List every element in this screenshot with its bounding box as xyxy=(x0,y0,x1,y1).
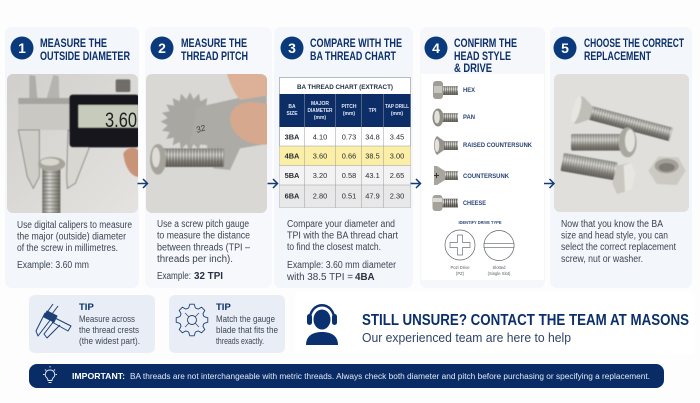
table: BA thread chart: (mm) xyxy=(343,111,355,117)
text: step 3 instructions xyxy=(286,219,398,283)
table: BA thread chart xyxy=(280,78,410,208)
table: BA thread chart: 2.30 xyxy=(390,192,404,200)
heading: measure the thread pitch xyxy=(181,36,248,63)
step number 2: 2 xyxy=(158,40,166,56)
text: step 1 instructions: of the screw in millimetres. xyxy=(17,243,118,254)
table: BA thread chart: TPI xyxy=(369,108,377,114)
icon: pozi drive xyxy=(445,230,475,276)
heading: confirm the head style and drive: HEAD STYLE xyxy=(454,49,511,63)
table: BA thread chart: 38.5 xyxy=(365,152,380,160)
table: BA thread chart: BA THREAD CHART (EXTRACT) xyxy=(297,84,393,91)
arrow: step 1 to 2 xyxy=(138,179,148,188)
step number 5: 5 xyxy=(561,40,569,56)
head style: raised countersunk: RAISED COUNTERSUNK xyxy=(463,143,533,149)
panel: step 2 measure the thread pitch xyxy=(146,36,267,281)
table: BA thread chart: TAP DRILL xyxy=(385,104,409,110)
heading: choose the correct replacement: REPLACEMENT xyxy=(584,49,651,63)
text: step 5 instructions: select the correct replacement xyxy=(561,242,676,253)
icon: pozi drive: (PZ) xyxy=(456,271,465,276)
text: tip 2: threads exactly. xyxy=(216,336,264,346)
text: step 3 instructions: to find the closest match. xyxy=(287,242,381,253)
text: step 1 instructions: the major (outside) diameter xyxy=(17,232,127,242)
table: BA thread chart: 43.1 xyxy=(365,171,380,180)
head style: cheese xyxy=(432,195,486,211)
label: identify drive type: IDENTIFY DRIVE TYPE xyxy=(458,220,502,225)
icon: support person with headset xyxy=(306,305,338,345)
icon: slotted drive: (Single Slot) xyxy=(488,271,511,276)
step number 4: 4 xyxy=(432,40,440,56)
step number 5 xyxy=(554,36,576,60)
panel: step 1 measure the outside diameter xyxy=(5,27,140,288)
tip card: match the gauge blade xyxy=(169,295,285,353)
table: BA thread chart: 47.9 xyxy=(365,192,380,200)
text: tip 1 xyxy=(79,302,140,346)
text: step 3 instructions: with 38.5 TPI = xyxy=(286,272,353,283)
table: BA thread chart: 34.8 xyxy=(365,132,380,142)
photo: replacement screws and nut xyxy=(554,74,689,212)
text: tip 2: TIP xyxy=(216,302,231,313)
table: BA thread chart: (mm) xyxy=(314,115,326,121)
important banner xyxy=(29,364,664,388)
text: step 2 instructions: between threads (TPI – xyxy=(157,242,250,254)
head style: countersunk xyxy=(434,166,510,185)
text: step 2 instructions: Use a screw pitch gauge xyxy=(157,219,249,230)
table: BA thread chart: BA xyxy=(288,104,296,110)
arrow: step 2 to 3 xyxy=(268,179,278,188)
text: tip 1: Measure across xyxy=(79,314,135,324)
text: step 5 instructions: Now that you know the BA xyxy=(561,219,663,230)
step number 2 xyxy=(150,36,174,60)
table: BA thread chart: 2.65 xyxy=(390,171,404,180)
icon: pozi drive: Pozi Drive xyxy=(450,265,470,270)
icon: slotted drive: Slotted xyxy=(492,265,506,270)
table: BA thread chart: 6BA xyxy=(285,192,300,200)
text: step 1 instructions: Use digital calipers to measure xyxy=(17,220,132,231)
text: important notice: BA threads are not interchangeable with metric threads. Always check both diameter and pitch before purchasing or specifying a replacement. xyxy=(130,372,650,381)
head style: cheese: CHEESE xyxy=(463,201,486,207)
white chart of head styles xyxy=(421,74,544,280)
arrow: step 4 to 5 xyxy=(544,179,554,188)
table: BA thread chart: 0.51 xyxy=(342,192,356,200)
text: step 2 instructions: Example: xyxy=(157,271,191,282)
text: step 2 instructions xyxy=(157,219,250,282)
text: tip 1: TIP xyxy=(79,302,94,313)
icon: slotted drive xyxy=(484,230,514,276)
heading: measure the outside diameter: OUTSIDE DIAMETER xyxy=(40,49,130,63)
contact panel xyxy=(295,292,695,354)
step number 3 xyxy=(280,36,304,60)
arrow: step 3 to 4 xyxy=(410,179,420,188)
photo: digital calipers reading 3.60: 3.60 xyxy=(105,109,137,132)
text: tip 1: (the widest part). xyxy=(79,336,140,346)
step number 1: 1 xyxy=(18,40,26,56)
heading: confirm the head style and drive: & DRIVE xyxy=(454,61,492,75)
tip card: measure across the thread crests xyxy=(29,295,155,353)
head style: countersunk: COUNTERSUNK xyxy=(463,174,510,180)
heading: measure the outside diameter: MEASURE THE xyxy=(40,36,107,50)
head style: hex: HEX xyxy=(463,88,475,94)
text: step 1 instructions xyxy=(17,220,132,271)
text: important notice: IMPORTANT: xyxy=(72,371,125,381)
table: BA thread chart: (mm) xyxy=(391,111,403,117)
heading: compare with the BA thread chart: BA THREAD CHART xyxy=(310,49,396,63)
table: BA thread chart: 3.00 xyxy=(390,152,404,160)
table: BA thread chart: 0.66 xyxy=(342,152,356,160)
text: step 1 instructions: Example: 3.60 mm xyxy=(17,260,89,271)
text: step 3 instructions: TPI with the BA thread chart xyxy=(287,230,398,242)
table: BA thread chart: SIZE xyxy=(286,111,298,117)
photo: screw pitch gauge on a screw xyxy=(146,72,270,213)
table: BA thread chart: DIAMETER xyxy=(308,108,333,114)
table: BA thread chart: PITCH xyxy=(342,104,357,110)
table: BA thread chart: MAJOR xyxy=(311,101,329,107)
table: BA thread chart: 4BA xyxy=(285,152,300,160)
heading: measure the thread pitch: THREAD PITCH xyxy=(181,49,248,63)
text: step 2 instructions: threads per inch). xyxy=(157,254,233,265)
text: tip 2 xyxy=(216,302,278,346)
table: BA thread chart: 4.10 xyxy=(313,132,327,142)
icon: light bulb xyxy=(43,366,57,382)
heading: confirm the head style and drive: CONFIRM THE xyxy=(454,36,517,50)
icon: gear xyxy=(176,304,208,336)
subheading: Our experienced team are here to help xyxy=(362,331,571,345)
heading: compare with the BA thread chart xyxy=(310,36,402,63)
icon: calipers xyxy=(36,304,71,338)
text: step 5 instructions: size and head style, you can xyxy=(561,230,668,242)
panel: step 3 compare with the BA thread chart xyxy=(274,27,413,288)
table: BA thread chart: 3.60 xyxy=(313,152,327,160)
text: tip 1: the thread crests xyxy=(79,325,139,335)
text: step 2 instructions: to measure the distance xyxy=(157,230,250,242)
table: BA thread chart: 3.45 xyxy=(390,132,404,142)
photo: digital calipers reading 3.60 xyxy=(7,74,140,213)
text: step 2 instructions: 32 TPI xyxy=(194,271,223,282)
text: step 5 instructions xyxy=(561,219,676,265)
text: tip 2: blade that fits the xyxy=(216,325,278,335)
photo: screw pitch gauge on a screw: 32 xyxy=(195,122,207,135)
heading: choose the correct replacement xyxy=(584,36,684,63)
table: BA thread chart: 2.80 xyxy=(313,192,327,200)
heading: confirm the head style and drive xyxy=(454,36,517,75)
table: BA thread chart: 3BA xyxy=(285,132,300,142)
panel: step 4 confirm the head style and drive xyxy=(420,27,545,288)
step number 4 xyxy=(424,36,448,60)
head style: raised countersunk xyxy=(434,136,533,155)
table: BA thread chart: 0.58 xyxy=(342,171,356,180)
table: BA thread chart: 0.73 xyxy=(342,132,356,142)
table: BA thread chart: 5BA xyxy=(285,171,300,180)
text: step 5 instructions: screw, nut or washer. xyxy=(561,254,643,265)
head style: pan xyxy=(432,108,475,126)
head style: hex xyxy=(433,81,475,99)
heading: measure the outside diameter xyxy=(40,36,130,63)
table: BA thread chart: 3.20 xyxy=(313,171,327,180)
heading: compare with the BA thread chart: COMPARE WITH THE xyxy=(310,36,402,50)
step number 3: 3 xyxy=(288,40,296,56)
head style: pan: PAN xyxy=(463,115,475,121)
panel: step 5 choose the correct replacement xyxy=(550,27,692,288)
text: step 3 instructions: Example: 3.60 mm diameter xyxy=(287,260,397,271)
text: step 3 instructions: Compare your diameter and xyxy=(287,219,395,230)
step number 1 xyxy=(10,36,34,60)
text: tip 2: Match the gauge xyxy=(216,314,275,324)
heading: measure the thread pitch: MEASURE THE xyxy=(181,36,247,50)
text: step 3 instructions: 4BA xyxy=(355,272,375,283)
